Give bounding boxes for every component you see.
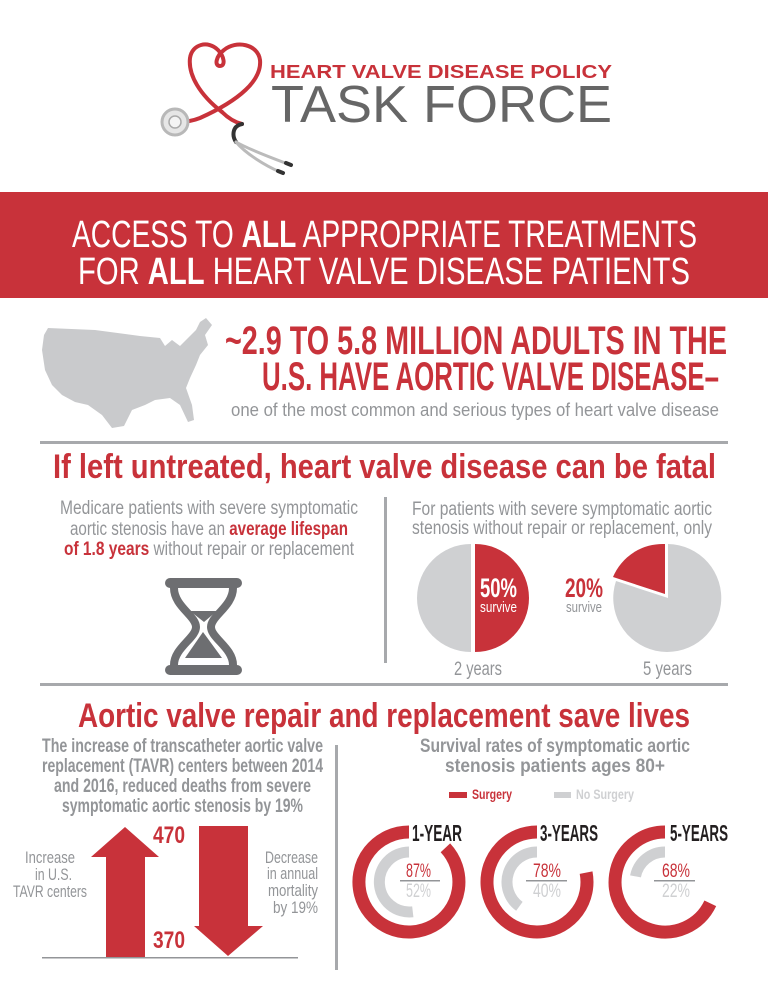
logo text: heart valve disease policy: HEART VALVE DISEASE POLICY bbox=[270, 62, 612, 82]
text: survival intro: stenosis without repair or replacement, only bbox=[412, 518, 712, 539]
logo bbox=[162, 44, 612, 173]
donut: 1 year: 52% bbox=[406, 881, 431, 902]
text: TAVR: The increase of transcatheter aortic valve bbox=[42, 736, 323, 757]
text: lifespan: Medicare patients with severe symptomatic bbox=[60, 498, 358, 519]
donut: 1 year: 87% bbox=[406, 861, 431, 882]
logo text: task force: TASK FORCE bbox=[271, 76, 612, 134]
donut: 1 year bbox=[359, 820, 462, 932]
text: survival intro: For patients with severe symptomatic aortic bbox=[412, 499, 712, 520]
pie: 5 years: survive bbox=[566, 599, 602, 616]
arrow chart: mortality bbox=[268, 881, 318, 900]
text: lifespan: of 1.8 years without repair or replacement bbox=[64, 539, 355, 560]
text: lifespan bbox=[60, 498, 358, 560]
headline stat bbox=[225, 319, 727, 420]
icon: US map bbox=[42, 318, 212, 428]
legend: No Surgery bbox=[576, 786, 634, 802]
arrow chart: 370 bbox=[153, 927, 185, 954]
text: TAVR: and 2016, reduced deaths from severe bbox=[54, 776, 311, 797]
donut: 3 years: 78% bbox=[533, 861, 561, 882]
pie: 2 years bbox=[417, 544, 529, 680]
pie: 5 years: 5 years bbox=[643, 659, 692, 680]
arrow chart: Increase bbox=[25, 848, 75, 867]
icon: hourglass bbox=[165, 578, 242, 675]
arrow chart: Decrease bbox=[265, 848, 318, 867]
pie: 2 years: 2 years bbox=[454, 659, 502, 680]
banner bbox=[0, 192, 768, 298]
text: TAVR: replacement (TAVR) centers between 2014 bbox=[42, 756, 323, 777]
arrow up bbox=[91, 827, 159, 958]
text: TAVR: symptomatic aortic stenosis by 19% bbox=[62, 796, 303, 817]
donut: 5 years: 22% bbox=[662, 881, 690, 902]
arrow chart bbox=[13, 822, 318, 958]
donut: 3 years bbox=[487, 820, 598, 932]
pie: 5 years bbox=[565, 544, 721, 680]
text: survival rates bbox=[420, 736, 690, 777]
donut: 5 years bbox=[615, 820, 728, 932]
arrow chart: by 19% bbox=[273, 898, 318, 917]
legend: Surgery bbox=[472, 786, 512, 802]
subtext: one of the most common and serious types of heart valve disease bbox=[231, 400, 719, 420]
donut: 3 years: 40% bbox=[533, 881, 561, 902]
arrow chart: TAVR centers bbox=[13, 882, 87, 901]
donut: 1 year: 1-YEAR bbox=[412, 820, 462, 846]
icon: heart stethoscope bbox=[162, 44, 291, 173]
pie: 2 years: 50% bbox=[480, 573, 517, 603]
text: lifespan: aortic stenosis have an average lifespan bbox=[70, 519, 348, 540]
arrow chart: 470 bbox=[153, 822, 185, 849]
arrow down bbox=[194, 826, 263, 956]
legend bbox=[449, 786, 634, 802]
text: survival intro bbox=[412, 499, 712, 539]
arrow chart: in annual bbox=[267, 864, 318, 883]
donut: 5 years: 68% bbox=[662, 861, 690, 882]
text: survival rates: stenosis patients ages 80+ bbox=[445, 756, 665, 777]
pie: 2 years: survive bbox=[480, 599, 517, 616]
donut: 3 years: 3-YEARS bbox=[540, 820, 598, 846]
arrow chart: in U.S. bbox=[35, 865, 72, 884]
donut: 5 years: 5-YEARS bbox=[670, 820, 728, 846]
text: TAVR bbox=[42, 736, 323, 817]
text: survival rates: Survival rates of symptomatic aortic bbox=[420, 736, 690, 757]
pie: 5 years: 20% bbox=[565, 573, 603, 603]
